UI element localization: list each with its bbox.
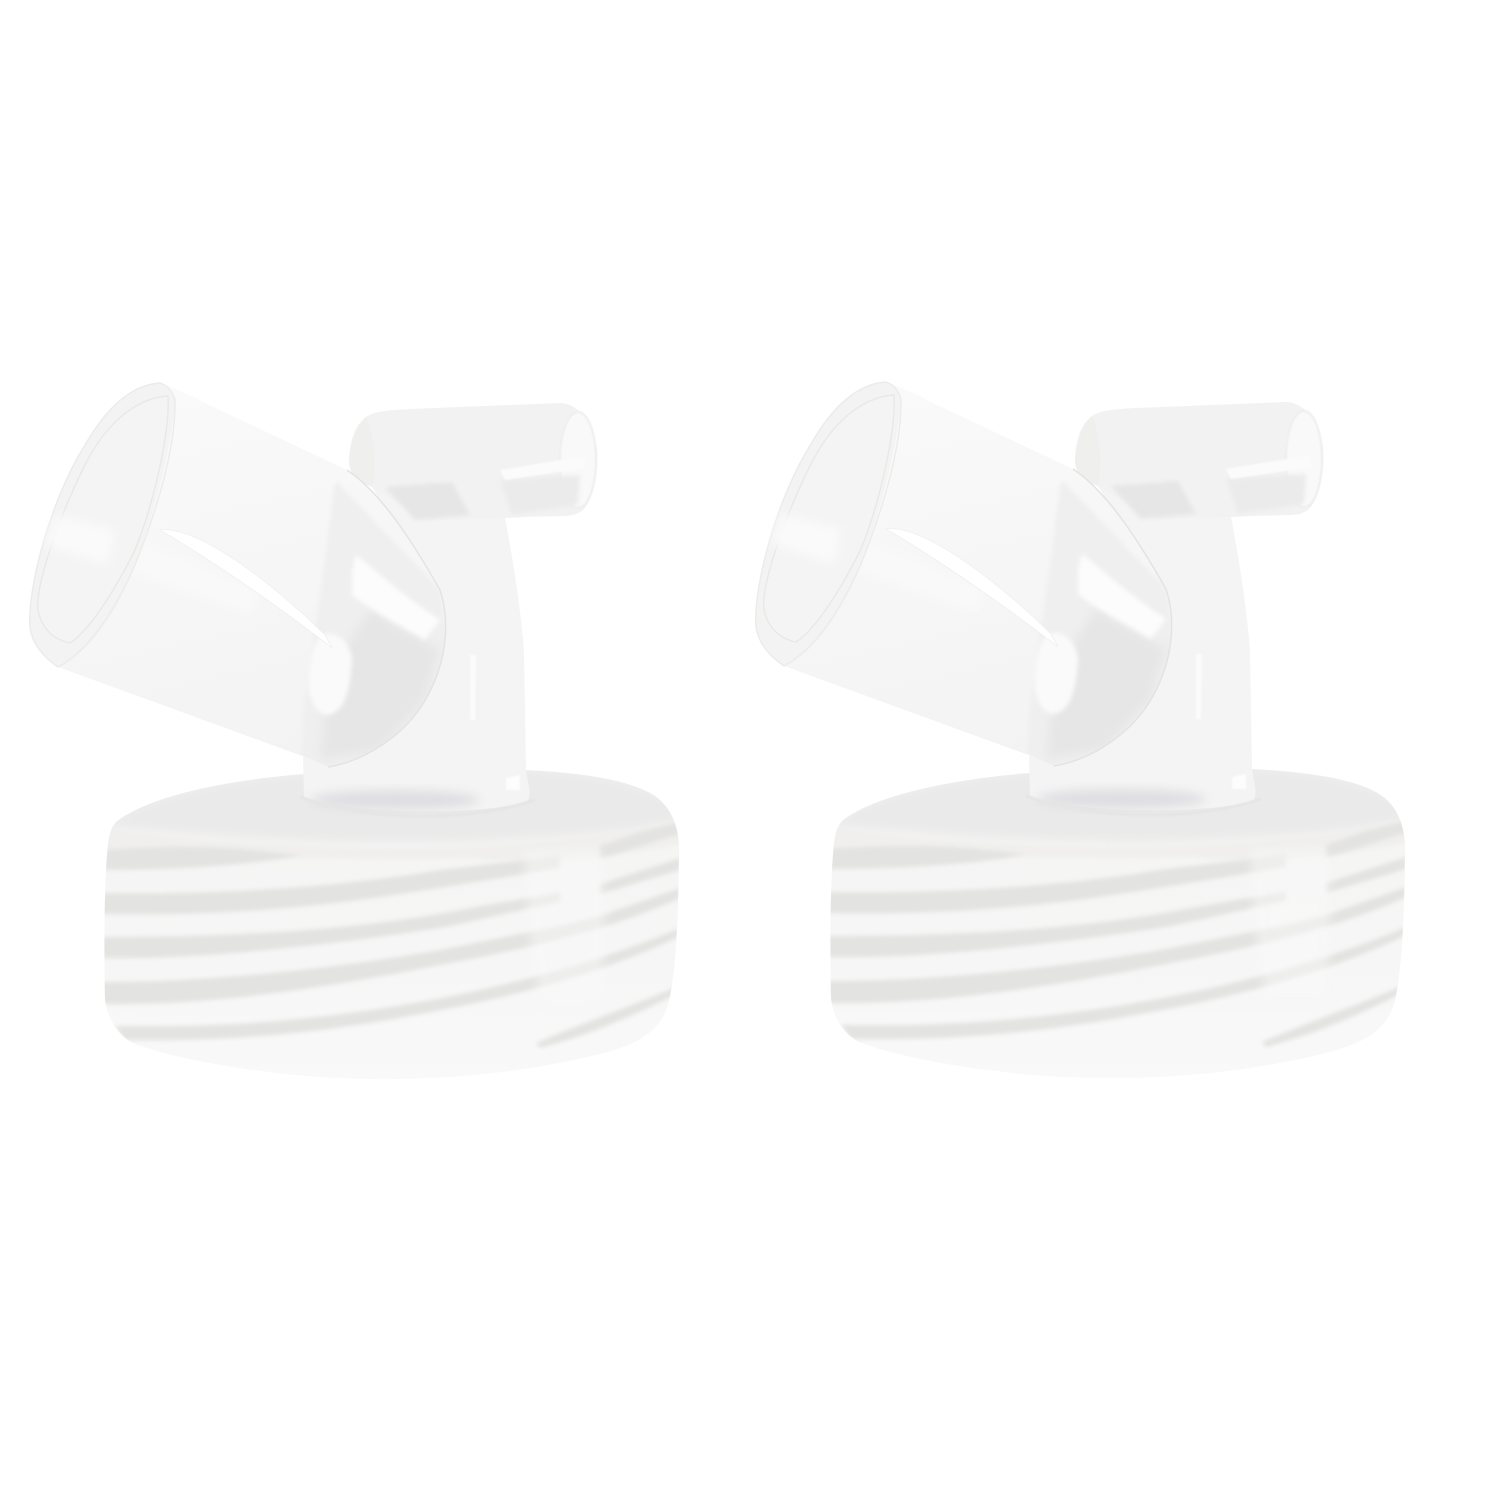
product photo: two clear silicone connectors (29, 381, 1405, 1051)
left connector (30, 383, 690, 1079)
right connector (756, 382, 1416, 1078)
